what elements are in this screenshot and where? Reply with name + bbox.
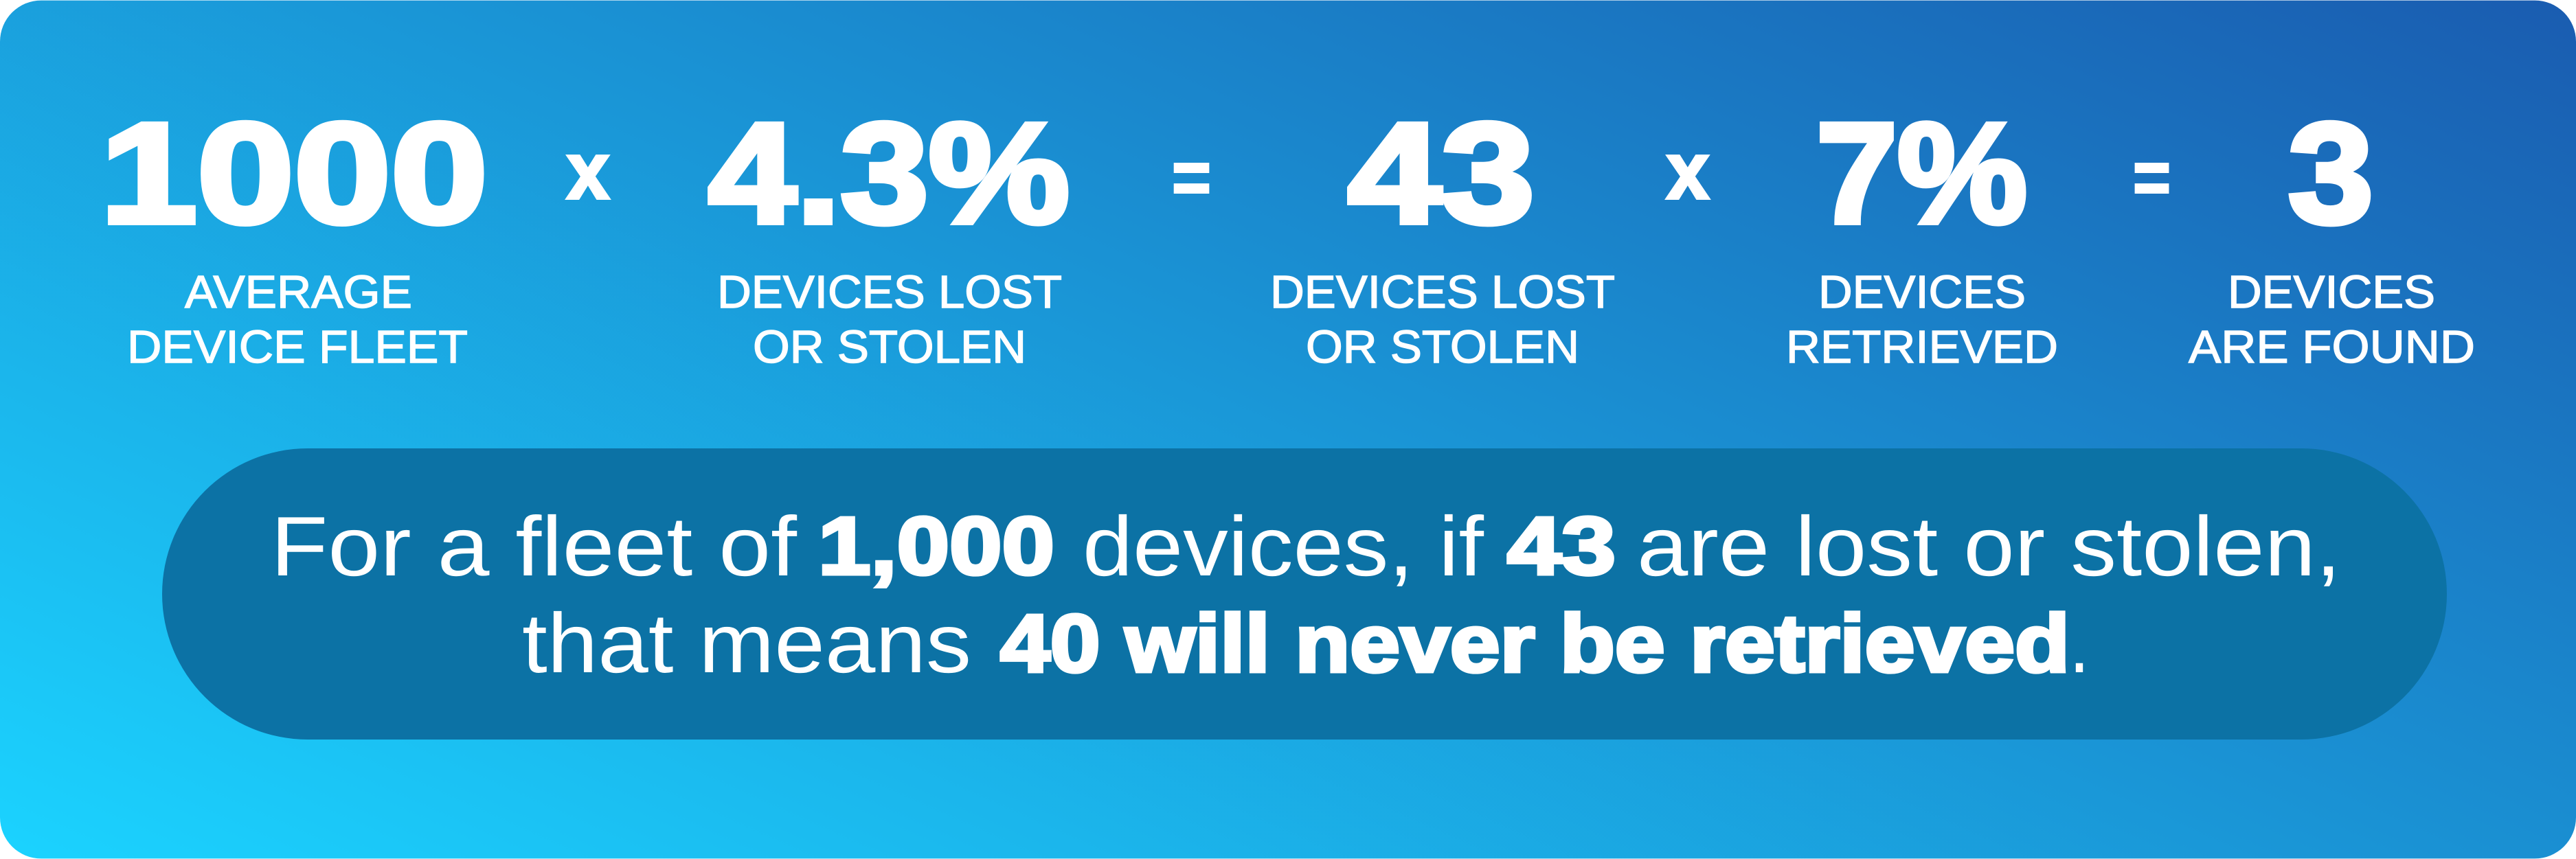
number: 7%: 7%	[1816, 94, 2027, 253]
label: devices are found: DEVICES	[2228, 266, 2435, 318]
callout: summary pill	[162, 448, 2447, 740]
text: first line of summary: devices, if	[1083, 500, 1484, 594]
label: devices retrieved	[1786, 266, 2058, 373]
label: devices are found: ARE FOUND	[2189, 321, 2475, 373]
label: devices lost or stolen	[1270, 266, 1615, 373]
label: devices retrieved: DEVICES	[1818, 266, 2026, 318]
label: devices lost or stolen	[717, 266, 1062, 373]
operator: equals: =	[1172, 135, 1211, 220]
operator: multiply: x	[1667, 126, 1709, 216]
label: average device fleet: DEVICE FLEET	[127, 321, 468, 373]
operator: equals: =	[2133, 135, 2171, 220]
text: first line of summary: For a fleet of	[271, 500, 798, 594]
term: 4.3% devices lost or stolen	[708, 94, 1070, 373]
label: average device fleet: AVERAGE	[185, 266, 412, 318]
text: second line of summary: .	[2069, 597, 2090, 691]
label: average device fleet	[127, 266, 468, 373]
label: devices retrieved: RETRIEVED	[1786, 321, 2058, 373]
text: first line of summary: 43	[1507, 501, 1616, 592]
label: devices lost or stolen: DEVICES LOST	[717, 266, 1062, 318]
label: devices lost or stolen: OR STOLEN	[1306, 321, 1579, 373]
term: 1000 average device fleet	[100, 94, 488, 373]
number: 3: 3	[2288, 94, 2373, 253]
number: 1000: 1000	[100, 94, 488, 253]
operator: multiply: x	[567, 126, 609, 216]
label: devices lost or stolen: DEVICES LOST	[1270, 266, 1615, 318]
term: 43 devices lost or stolen	[1270, 94, 1615, 373]
label: devices are found	[2189, 266, 2475, 373]
term: 3 devices are found	[2189, 94, 2475, 373]
number: 4.3%: 4.3%	[708, 94, 1070, 253]
term: 7% devices retrieved	[1786, 94, 2058, 373]
equation row	[100, 94, 2475, 373]
text: first line of summary	[271, 500, 2341, 594]
label: devices lost or stolen: OR STOLEN	[753, 321, 1026, 373]
text: second line of summary: that means	[522, 597, 971, 691]
text: first line of summary: are lost or stolen,	[1637, 500, 2341, 594]
number: 43: 43	[1348, 94, 1535, 253]
text: first line of summary: 1,000	[818, 501, 1054, 592]
text: second line of summary: 40 will never be retrieved	[1000, 598, 2070, 689]
text: second line of summary	[522, 597, 2090, 691]
